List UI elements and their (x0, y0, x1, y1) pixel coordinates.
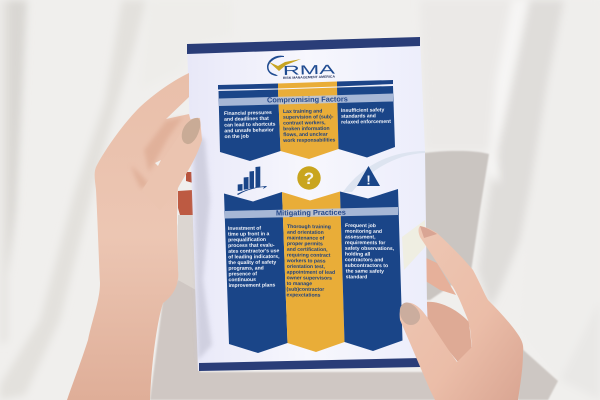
text: lax training (282, 108, 336, 144)
text: thorough training: expexctations (287, 292, 321, 299)
heading band: mitigating practices (225, 207, 398, 218)
text: insufficient safety: Insufficient safety (341, 107, 384, 114)
icon: warning triangle: ! (366, 172, 371, 188)
heading band: compromising factors (219, 94, 393, 106)
left thumb nail (182, 118, 200, 144)
small gap between fingers (155, 160, 161, 166)
text: lax training: flows, and unclear (283, 132, 328, 138)
text: frequent job monitoring: requirements for (345, 240, 385, 246)
text: frequent job monitoring: Frequent job (345, 223, 376, 229)
text: thorough training: Thorough training (287, 224, 331, 230)
top navy band (187, 37, 420, 54)
text: thorough training: and orientation (287, 230, 324, 236)
text: investment of time: prequalification (228, 237, 266, 243)
text: lax training: Lax training and (283, 109, 322, 115)
text: lax training: supervision of (sub)- (283, 114, 334, 121)
text: lax training: contract workers, (283, 120, 326, 127)
icon: question mark circle: ? (304, 169, 314, 188)
text: lax training: broken information (283, 126, 330, 132)
text: thorough training: workers to pass (286, 258, 326, 264)
left hand holding the flyer (67, 73, 202, 400)
panel: compromising factors column 2 (278, 88, 338, 159)
text: frequent job monitoring: holding all (345, 251, 371, 258)
faint beige chevron (402, 220, 426, 270)
text: thorough training: to manage (287, 281, 312, 287)
panel: compromising factors column 1 (218, 90, 280, 161)
icon: warning triangle (357, 166, 380, 188)
text: investment of time: presence of (228, 271, 257, 278)
text: investment of time (228, 225, 280, 289)
panel: compromising factors column 3 (337, 86, 395, 158)
text: investment of time: programs, and (228, 266, 264, 272)
back fingers of left hand (178, 172, 193, 215)
icon: rising bar chart (237, 166, 267, 195)
bottom navy band (199, 358, 421, 371)
text: thorough training: maintenance of (287, 235, 325, 242)
text: investment of time: Investment of (228, 226, 261, 232)
panel: mitigating practices column 1 (224, 192, 288, 353)
panel: mitigating practices column 2 (282, 192, 344, 352)
soft shadow on the flyer's left edge (193, 130, 212, 360)
text: investment of time: process that evalu- (228, 243, 275, 249)
text: thorough training: and certification, (287, 247, 328, 253)
text: thorough training: requiring contract (287, 252, 331, 259)
logo tagline: RISK MANAGEMENT AMERICA (283, 75, 336, 80)
finger pocket shading (131, 117, 183, 189)
back fingers of right hand (424, 257, 472, 362)
text: financial pressures: and deadlines that (224, 116, 269, 123)
heading text: Compromising Factors (267, 94, 348, 104)
text: frequent job monitoring (345, 223, 395, 281)
text: thorough training: owner supervisors (287, 275, 332, 282)
text: investment of time: continuous (228, 277, 256, 283)
text: frequent job monitoring: monitoring and (345, 229, 382, 235)
text: thorough training (286, 224, 335, 299)
logo swoosh (267, 56, 284, 76)
text: frequent job monitoring: contractors and (345, 257, 383, 263)
logo check mark (269, 59, 301, 71)
text: investment of time: time up front in a (228, 231, 270, 238)
text: investment of time: ates contractor's use (228, 248, 279, 255)
top strip over columns (218, 80, 393, 90)
text: financial pressures: and unsafe behavior (224, 127, 274, 134)
text: frequent job monitoring: the same safety (346, 269, 384, 275)
right index nail (420, 226, 437, 238)
text: thorough training: (sub)contractor (287, 287, 324, 293)
right thumb nail (400, 303, 420, 325)
text: financial pressures: on the job (224, 134, 249, 140)
text: investment of time: improvement plans (229, 283, 275, 289)
text: financial pressures: Financial pressures (224, 110, 272, 117)
text: frequent job monitoring: assessment, (345, 234, 376, 241)
text: investment of time: the quality of safety (228, 260, 276, 266)
text: frequent job monitoring: safety observations, (345, 246, 395, 252)
flyer page (187, 37, 429, 371)
text: thorough training: appointment of lead (287, 270, 335, 276)
right hand holding the flyer (400, 226, 523, 400)
text: insufficient safety (341, 107, 391, 126)
text: financial pressures (224, 110, 276, 140)
icon: question mark circle (297, 166, 321, 190)
text: thorough training: orientation test, (287, 264, 326, 270)
logo letters: RMA (283, 62, 336, 78)
text: investment of time: of leading indicators, (228, 254, 280, 260)
text: thorough training: proper permits (287, 241, 323, 247)
panel: mitigating practices column 3 (340, 189, 402, 351)
heading text: Mitigating Practices (276, 208, 346, 217)
text: insufficient safety: standards and (341, 113, 376, 120)
pale shadow beside the palm (178, 215, 196, 290)
text: financial pressures: can lead to shortcuts (224, 122, 276, 129)
text: frequent job monitoring: standard (346, 274, 367, 280)
text: insufficient safety: relaxed enforcement (341, 119, 391, 126)
taupe shadow below the right hand (518, 347, 558, 400)
logo: RMA Risk Management America (267, 56, 336, 80)
taupe shadow below the flyer (150, 215, 440, 400)
taupe shadow right of the flyer (424, 151, 489, 300)
text: frequent job monitoring: subcontractors to (345, 263, 388, 269)
faint swoosh on the flyer (343, 151, 425, 192)
left thumb (142, 118, 202, 210)
text: lax training: work responsabilities (282, 137, 336, 144)
